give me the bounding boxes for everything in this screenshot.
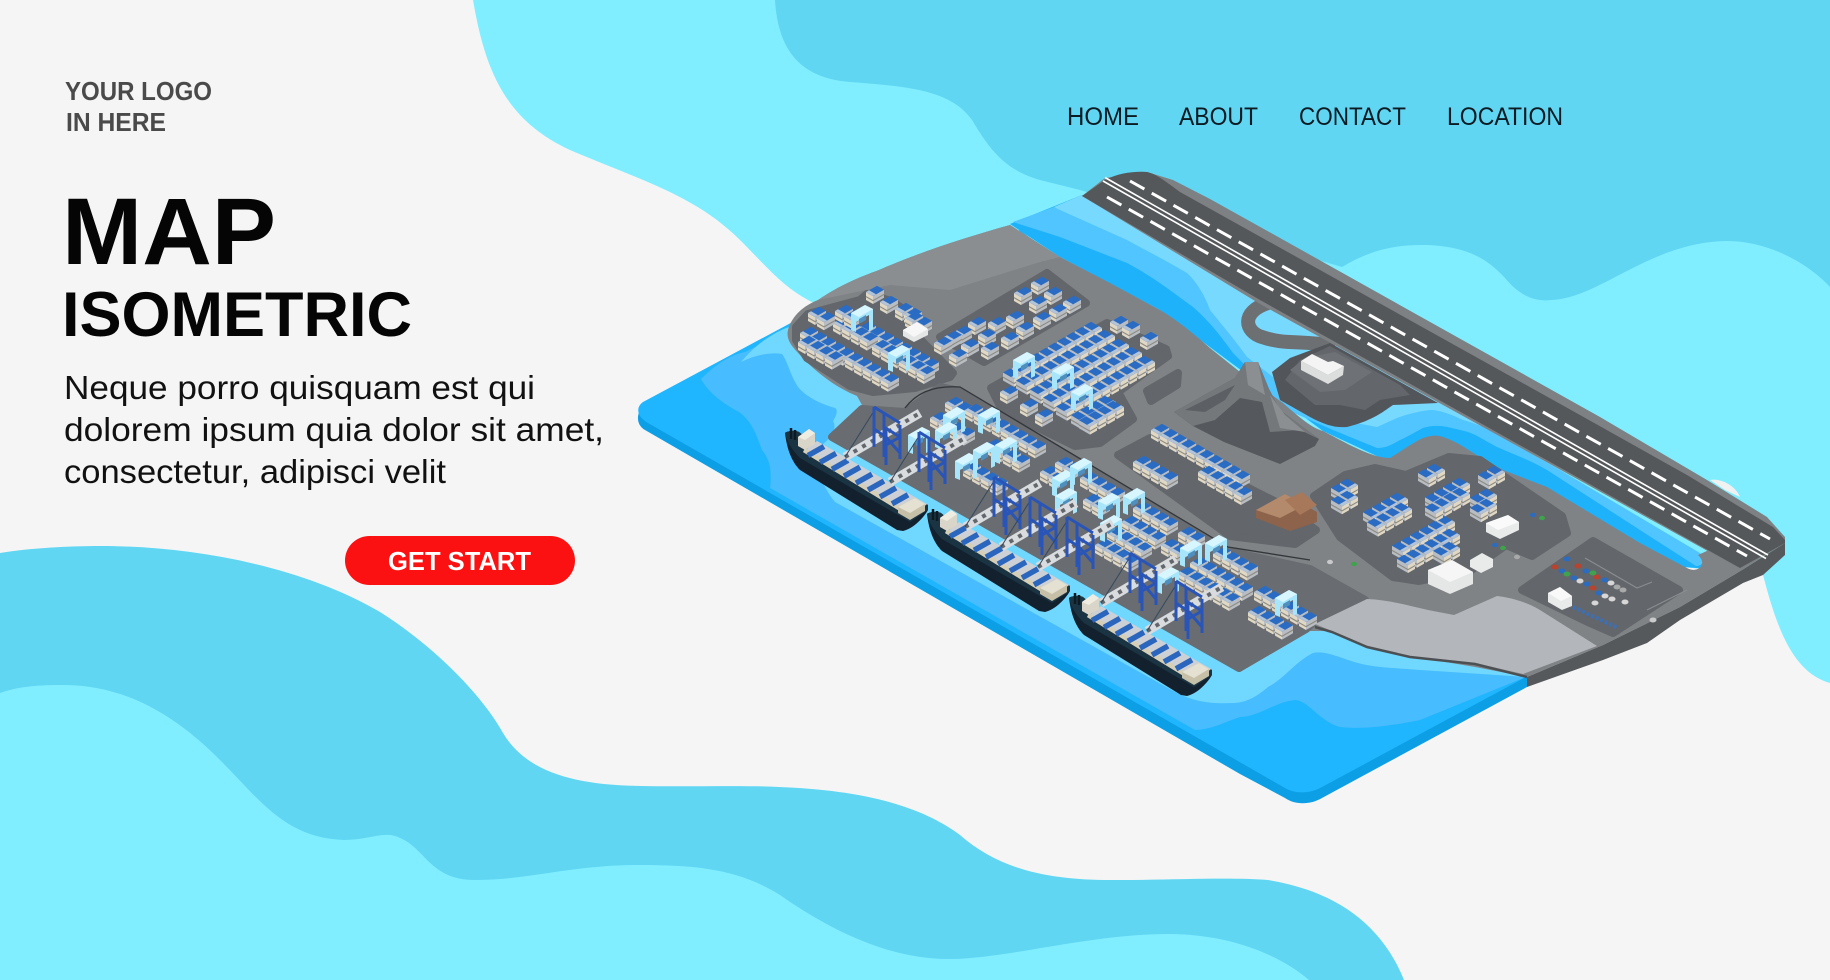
container ship 3 — [1069, 593, 1212, 696]
isometric port map — [638, 172, 1785, 803]
icon: white warehouse north-west — [903, 322, 928, 342]
centre double line — [1103, 178, 1768, 558]
asphalt — [1082, 172, 1785, 568]
icon: gatehouse — [1548, 587, 1572, 610]
mountain — [1174, 362, 1319, 464]
icon: brown terminal building — [1256, 492, 1317, 531]
pad: north-west yard — [796, 294, 953, 392]
pad: east yard — [1314, 457, 1567, 581]
top light cyan wave — [473, 0, 1830, 683]
pad: north block — [940, 273, 1086, 362]
sand shore — [1315, 596, 1597, 674]
road shoulder — [1082, 172, 1785, 570]
blue parking row — [1573, 607, 1618, 628]
road — [1082, 172, 1785, 570]
container ship 1 — [785, 428, 928, 531]
land and road front side — [1527, 543, 1785, 687]
container yard pads — [796, 273, 1679, 668]
nav: contact: CONTACT — [1299, 103, 1406, 131]
description text: consectetur, adipisci velit — [64, 453, 446, 490]
containers: quay apron — [930, 397, 1258, 611]
description text: Neque porro quisquam est qui — [64, 369, 535, 406]
river — [1010, 195, 1720, 570]
parking lot — [1548, 556, 1687, 628]
white dome behind road — [1710, 480, 1740, 497]
lower lane dashes — [1107, 197, 1747, 556]
pad: central block — [991, 323, 1168, 446]
containers: central block — [1000, 316, 1158, 435]
hill island — [1272, 343, 1438, 427]
title: isometric: ISOMETRIC — [62, 280, 412, 350]
navigation — [1067, 103, 1563, 131]
button: get start: GET START — [388, 546, 531, 576]
title: map: MAP — [62, 179, 276, 285]
pad: parking — [1522, 541, 1679, 633]
land mass — [788, 225, 1742, 677]
nav: about: ABOUT — [1179, 103, 1258, 131]
icon: white building on hill — [1301, 354, 1344, 384]
quay lines — [905, 387, 1310, 560]
nav: home: HOME — [1067, 103, 1139, 131]
upper lane dashes — [1130, 181, 1770, 539]
description text: dolorem ipsum quia dolor sit amet, — [64, 411, 604, 448]
containers: east yard — [1331, 464, 1505, 573]
containers: north block — [934, 277, 1081, 367]
logo: YOUR LOGO — [65, 76, 212, 106]
yard vehicles — [1327, 513, 1656, 622]
button: get start — [345, 536, 575, 585]
bottom light cyan wave — [0, 685, 1309, 980]
water plate — [638, 230, 1540, 803]
container ship 2 — [927, 509, 1070, 612]
pad: middle lot — [1118, 438, 1316, 544]
quay cranes — [845, 407, 1222, 639]
sand shore dark edge — [1315, 627, 1527, 677]
pad: apron — [832, 387, 1365, 668]
logo: IN HERE — [66, 107, 166, 137]
top mid blue wave — [775, 0, 1830, 300]
containers: middle lot — [1133, 424, 1317, 640]
road loop — [1248, 303, 1335, 346]
parked cars — [1552, 556, 1628, 606]
bottom mid blue wave — [0, 546, 1404, 980]
river shore shade — [818, 225, 1060, 300]
containers: north-west yard — [798, 286, 939, 392]
nav: location: LOCATION — [1447, 103, 1563, 131]
yard gantry cranes — [851, 305, 1297, 617]
icon: white warehouses east — [1428, 515, 1519, 594]
parking lines — [1585, 558, 1687, 610]
pad: small loop lot — [1147, 373, 1178, 401]
